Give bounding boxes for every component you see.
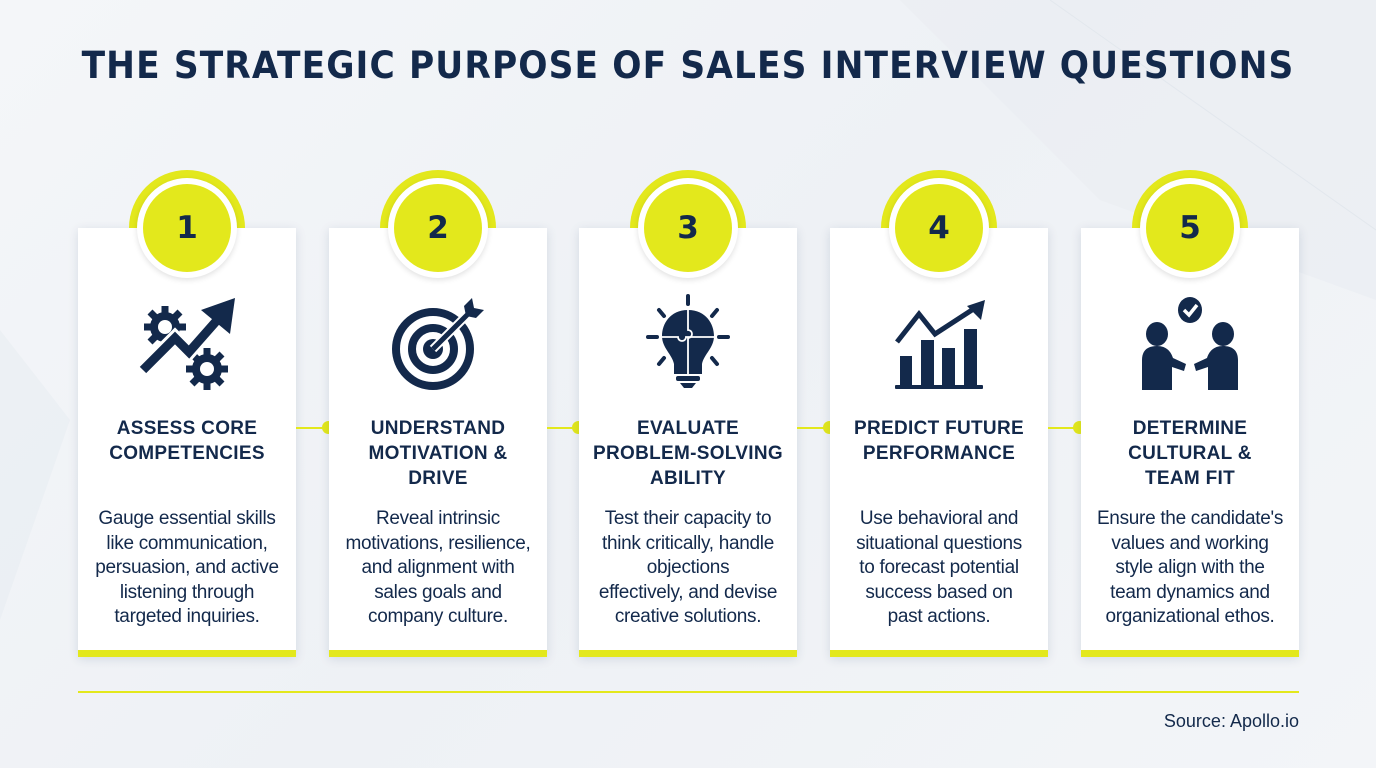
badge 3: 3	[677, 210, 699, 246]
heading	[593, 418, 783, 489]
heading: EVALUATE	[637, 418, 739, 439]
card 3	[579, 228, 797, 657]
body text: objections	[647, 557, 729, 578]
connector 3-4	[797, 421, 830, 434]
heading: DRIVE	[408, 468, 468, 489]
body text: effectively, and devise	[599, 582, 777, 603]
body text: motivations, resilience,	[346, 533, 530, 554]
card 5	[1081, 228, 1299, 657]
body text: listening through	[120, 582, 254, 603]
body text: Ensure the candidate's	[1097, 508, 1283, 529]
body text: and alignment with	[361, 557, 515, 578]
card 1	[78, 228, 296, 657]
heading: CULTURAL &	[1128, 443, 1252, 464]
icon: bar chart growth	[895, 300, 985, 389]
connector 2-3	[547, 421, 579, 434]
body text: past actions.	[888, 606, 990, 627]
body text	[95, 508, 279, 627]
body text: Gauge essential skills	[98, 508, 276, 529]
badge 4	[889, 178, 989, 278]
heading: PREDICT FUTURE	[854, 418, 1024, 439]
body text: like communication,	[106, 533, 268, 554]
body text: to forecast potential	[859, 557, 1019, 578]
icon: target	[392, 298, 484, 390]
heading: TEAM FIT	[1145, 468, 1235, 489]
heading	[854, 418, 1024, 464]
body text	[346, 508, 530, 627]
badge 3	[638, 178, 738, 278]
icon: lightbulb puzzle	[646, 294, 730, 388]
body text: think critically, handle	[602, 533, 774, 554]
card 4	[830, 228, 1048, 657]
body text: Reveal intrinsic	[376, 508, 500, 529]
heading	[368, 418, 508, 489]
body text	[856, 508, 1022, 627]
body text: persuasion, and active	[95, 557, 279, 578]
heading: DETERMINE	[1133, 418, 1247, 439]
heading	[1128, 418, 1252, 489]
heading: ASSESS CORE	[117, 418, 257, 439]
body text: creative solutions.	[615, 606, 761, 627]
body text: company culture.	[368, 606, 508, 627]
heading: MOTIVATION &	[368, 443, 508, 464]
heading: UNDERSTAND	[371, 418, 505, 439]
body text: targeted inquiries.	[114, 606, 260, 627]
connector 1-2	[296, 421, 329, 434]
badge 1: 1	[176, 210, 198, 246]
badge 1	[137, 178, 237, 278]
heading: PROBLEM-SOLVING	[593, 443, 783, 464]
body text: Use behavioral and	[860, 508, 1018, 529]
badge 2	[388, 178, 488, 278]
heading: COMPETENCIES	[109, 443, 265, 464]
body text: style align with the	[1115, 557, 1265, 578]
badge 5	[1140, 178, 1240, 278]
badge 2: 2	[427, 210, 449, 246]
body text	[599, 508, 777, 627]
heading: ABILITY	[650, 468, 726, 489]
body text: team dynamics and	[1110, 582, 1270, 603]
badge 4: 4	[928, 210, 950, 246]
card 2	[329, 228, 547, 657]
bottom rule	[78, 691, 1299, 693]
title: THE STRATEGIC PURPOSE OF SALES INTERVIEW QUESTIONS	[82, 44, 1294, 87]
heading: PERFORMANCE	[863, 443, 1015, 464]
connector 4-5	[1048, 421, 1081, 434]
body text: values and working	[1111, 533, 1269, 554]
icon: handshake people check	[1142, 297, 1238, 390]
source: Source: Apollo.io	[1164, 711, 1299, 731]
body text: situational questions	[856, 533, 1022, 554]
body text	[1097, 508, 1283, 627]
body text: Test their capacity to	[605, 508, 771, 529]
body text: organizational ethos.	[1105, 606, 1275, 627]
heading	[109, 418, 265, 464]
icon: gears and arrow	[140, 298, 235, 390]
badge 5: 5	[1179, 210, 1201, 246]
body text: sales goals and	[374, 582, 502, 603]
body text: success based on	[865, 582, 1013, 603]
